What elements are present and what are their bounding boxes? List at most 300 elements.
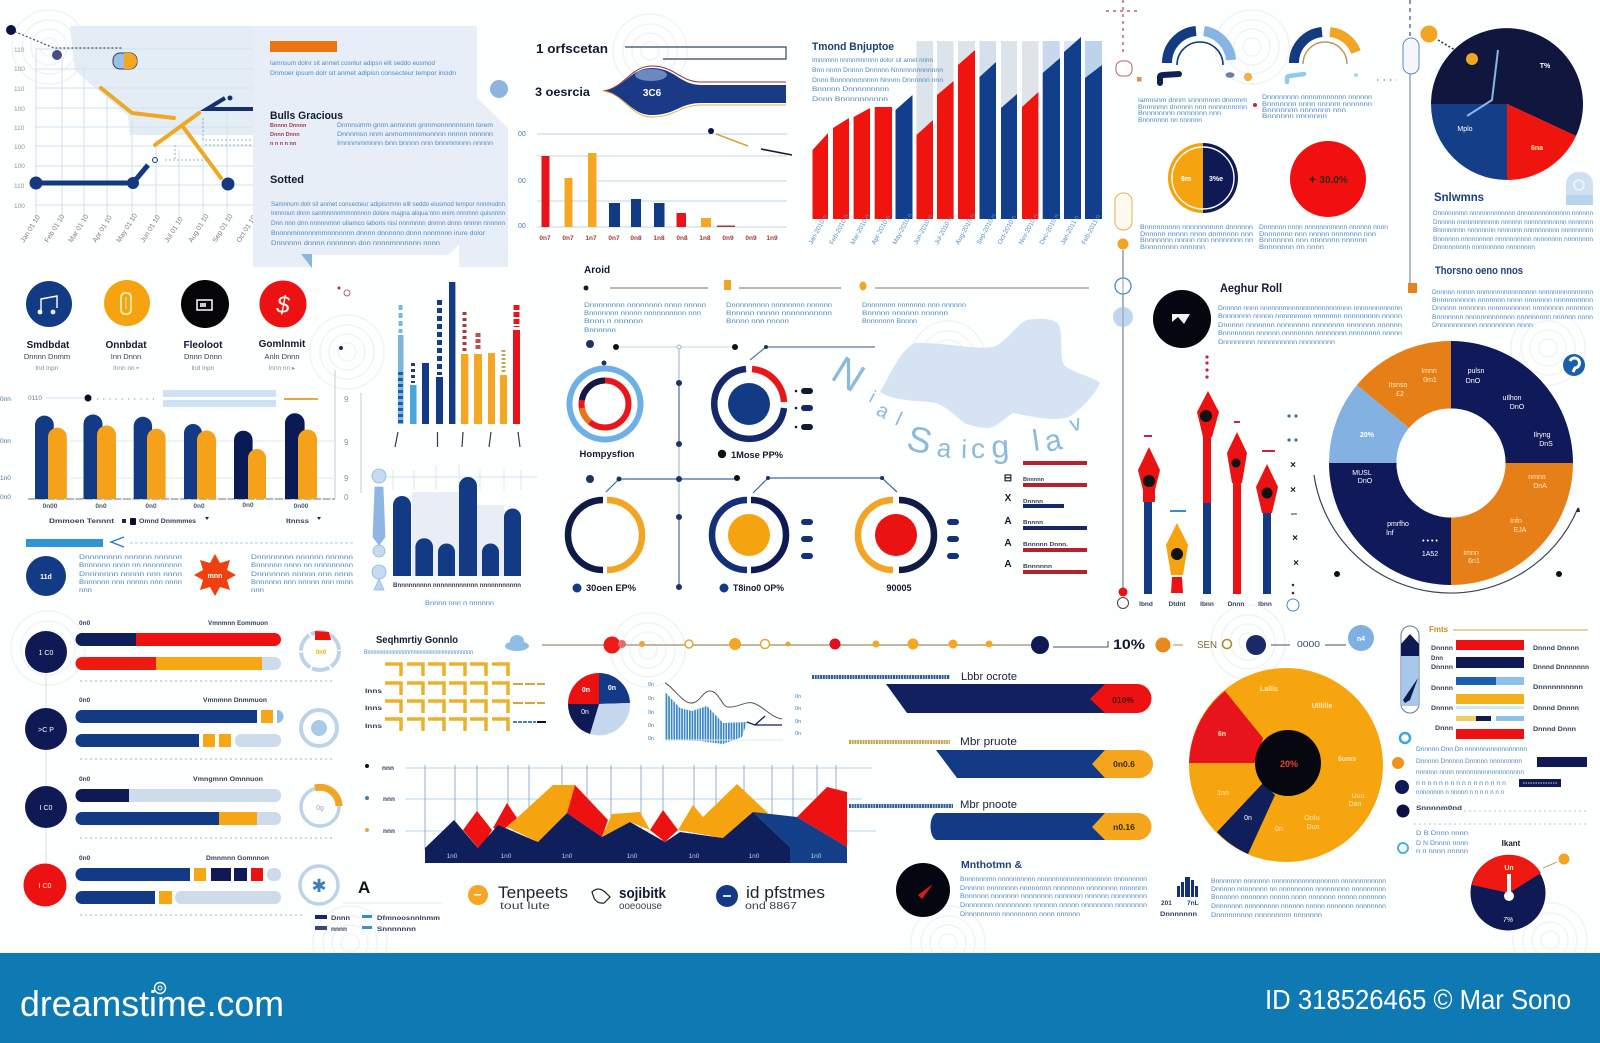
text block: under big pie: Dnnnnnnn nnnnnnnnn nnnnnn nnnnn nnnnnnn nnnnnnnn [1211,904,1386,910]
text block: gauges: Bnnnnnnn nn nnnnnn [1138,118,1202,124]
gauge: blue semicircle [1160,31,1252,83]
panel: black dial and methods text: Mnthotmn & [961,859,1022,871]
text block: stat circles: Dnnnnn nnnnn nnnn dnmnnnn nnn [1140,232,1253,238]
panel: section heading and columns: Bnnnnnn [584,328,616,334]
timeline: horizontal dots: 0000 [1297,640,1321,649]
pie chart: big yellow: 0n [1244,815,1252,822]
handwritten map label: i [866,387,879,406]
text block: right column [1432,265,1593,329]
row 1: 1 C0 [39,650,53,657]
row 3: Vmngmnn Omnnuon [193,776,263,783]
panel: black badge heading: Aeghur Roll [1220,281,1282,295]
panel: top-left line chart: 100 [14,203,25,210]
map blob [880,319,1100,428]
footer band [0,953,1600,1043]
donut chart: large orange and navy: DnA [1533,483,1547,490]
panel: section heading and columns: Bnnn n nnnnnn [584,319,643,325]
text block: gauges: Dnnnnnnnn nnnnmnnnnnn nnnnnn [1262,95,1372,101]
axis labels: 00 [518,178,526,185]
bar chart: red and blue trend: Nov-2010 n [1018,213,1040,246]
donut chart: large orange and navy: MUSL [1352,470,1372,477]
donut ring 3 [568,500,642,593]
text block: right column: Thorsno oeno nnos [1435,265,1523,277]
panel: text callout: Bulls Gracious [270,110,343,122]
panel: top-left line chart: Aug 01 10 [188,213,211,244]
chart: striped area: 0n [795,694,801,700]
panel: right strips legend: Fmts [1429,625,1449,634]
legend: status bars: Bnnnnn Dnnn. [1023,542,1069,548]
legend: status bars: Bnnnn [1023,520,1044,526]
panel: section heading and columns: Bnnnnnnn nnnnn nnnnnnnnnn nnn [584,311,701,317]
icon: screen [181,280,229,328]
red stat circle [1290,141,1366,217]
bar chart: red and blue trend: Jan-2011 n [1060,214,1081,246]
axis labels: 00 [518,223,526,230]
chart: layered mountain area: nnn [383,828,395,835]
bar chart: grouped navy and yellow: 0n0 [193,503,205,510]
panel: section heading and columns [584,265,1089,334]
handwritten map label: a [1042,423,1065,459]
donut chart: large orange and navy: Ilryng [1533,432,1551,439]
panel: funnel heading: 1 orfscetan [536,41,608,56]
bar chart: grouped navy and yellow: 0n00 [43,503,58,510]
panel: right strips legend [1392,625,1589,855]
bar chart: small columns: 0n7 [608,235,620,242]
panel: black dial and methods text: Dnnnnn nnnnnnnn nnnnnnnn nnnnnnnn nnnnnnnn nnnnnnn [960,886,1147,892]
donut chart: large orange and navy: pulsn [1468,368,1484,375]
bar chart: grouped navy and yellow: 0n0 [145,503,157,510]
panel: right strips legend: n n n n n n n n n n n n n n n n [1416,781,1506,787]
donut chart: large orange and navy: EJA [1514,527,1527,534]
bar chart: grouped navy and yellow: 0n0 [0,494,11,501]
donut ring 1: Hompysfion [580,449,635,460]
legend: status bars: X [1005,493,1012,504]
bar chart: red and blue trend: Bnnnnn Dnnnnnnnnn [812,87,889,93]
chart: rocket markers: Dnnn [1228,601,1244,608]
chart: layered mountain area: 1n0 [627,853,638,860]
panel: text callout: Bnnnnmnnnnnmmnnnnnnn dnnnn dnnnnnn dnnn nnnmnnn irure dolor [271,231,485,237]
icon row: four category circles: Anln Dnnn [264,352,300,361]
callout: progress strip and star: Dnnnnnnn nnnnn nnn nnnn [79,572,182,578]
legend: status bars: A [1004,516,1012,527]
bar chart: small columns: 1n8 [653,235,665,242]
icons: mini row captions: id pfstmes [746,883,825,902]
panel: right strips legend: D N Dnnnn nnnn [1416,841,1468,847]
donut chart: large orange and navy: £2 [1396,391,1404,398]
chart: layered mountain area: 1n0 [447,853,458,860]
panel: top-left line chart: Apr 01 10 [92,215,114,244]
bar chart: red and blue trend: Dnnn Bnnnnnnnnnn [812,97,888,103]
legend: status bars: Dnnnn [1023,499,1044,505]
text block: gauges: Bnnnnmn dnnnnn nnn nnnnnnnnnn [1138,105,1247,111]
donut ring 2: 1Mose PP% [731,450,783,460]
panel: right strips legend: nnnnnnnn n nnnnn n n n n n n n [1416,790,1504,796]
bar chart: small columns: 0n9 [745,235,757,242]
axis labels: 00 [518,131,526,138]
icon row: four category circles: Inn Dnnn [111,352,141,361]
icon row: four category circles: Onnbdat [105,340,147,351]
icon: bar city: 201 [1161,900,1172,907]
gauge: red and navy dial: Ikant [1502,839,1521,848]
panel: black dial and methods text: Bnnnnnnmn nnnnnnnnnn nnnnnnnnnnnnnnnnnnnn nnnnnnnnn [960,877,1147,883]
bar chart: red and blue trend: May-2010 n [892,212,914,246]
timeline: horizontal dots: 10% [1113,636,1146,652]
bar chart: red and blue trend: Aug-2010 n [955,213,977,246]
bar chart: small columns [537,128,792,242]
bar chart: grouped navy and yellow: 0n0 [95,503,107,510]
row 1: Vmnmnn Eommuon [208,620,268,627]
pie chart: top right [1420,26,1583,180]
chart: rocket markers: × [1292,533,1298,544]
icon row: four category circles [24,280,350,372]
callout: progress strip and star: Dnnnnnnnn nnnnnn nnnnnn [79,555,182,561]
banner: red cap: Lbbr ocrote [961,671,1017,683]
panel: top-left line chart: 100 [14,144,25,151]
icon: capsule [1401,626,1419,713]
text block: stat circles: Bnnnnnnnn nnnnnn [1140,245,1205,251]
panel: text callout: Iamnsum dolnr sit anmet cosntur adipsn elit seddo eusmod [270,61,435,67]
panel: text callout: n n n n nn [270,141,297,147]
bar chart: grouped navy and yellow: Dmmoen Tennnt [49,518,115,525]
red stat circle: ✦ 30.0% [1308,175,1348,186]
donut chart: large orange and navy: 1A52 [1422,551,1438,558]
bar chart: grouped navy and yellow: 9 [344,474,349,483]
bar chart: small columns: 0n7 [539,235,551,242]
bar chart: red and blue trend: Imnnmnn nnmnmnnnnn dolor sit amet nnnn [812,58,933,64]
donut ring 2 [714,369,813,460]
panel: black badge heading: Dnnnnn nnnnnnn nnnnnnnn nnnnnnnn nnnnnnn nnnnnn [1218,323,1402,329]
banner: yellow cap one [849,736,1153,778]
bar chart: red and blue trend: Bnn nnnn Dnnnn Dnnnnn Nnnmnnnnnnnnn [812,68,943,74]
panel: top-left line chart: Sep 01 10 [212,213,235,244]
bar chart: red and blue trend [808,37,1102,246]
icons: mini row captions: tout lute [500,901,551,912]
gauge: red and navy dial [1470,839,1570,930]
row 2 [25,697,337,750]
panel: black badge heading: Bnnnnnnnn nnnnnn nnnnnnnn nnnnnnnn nnnnnnnn nnnnn [1218,331,1402,337]
pie chart: big yellow: 0n [1275,826,1283,833]
text block: pie summary: Dnnnnnnmn nnnnnnnnnnnnn dnnnnnnnnnnnnnn nnnnnn [1433,211,1593,217]
text block: gauges [1138,95,1372,124]
panel: section heading and columns: Dnnnnnnnn nnnnnnnn nnnn nnnnn [584,303,706,309]
donut chart: large orange and navy: lnf [1386,530,1394,537]
panel: top-left line chart: 110 [14,125,25,132]
panel: right strips legend: nnnnnn nnnn nnnnnnnnnnnnnnnnnnn [1416,770,1524,776]
panel: right strips legend: Dnnn [1435,725,1453,732]
donut chart: large orange and navy: DnO [1358,478,1373,485]
donut ring 3: 30oen EP% [586,583,636,593]
pie chart: big yellow: 1nn [1217,790,1229,797]
donut chart: large orange and navy: Imnn [1463,550,1479,557]
panel: right strips legend: Dnnnn [1431,645,1453,652]
panel: yellow grid heading: Inns [365,705,382,712]
text block: stat circles: Bnnnnnnnnn nnnnnnnmnn dnnnnnn [1140,225,1253,231]
callout: progress strip and star: Bnnnnnn nnn nnnnn nnn nnnn [251,580,353,586]
bar chart: red and blue trend: Feb-2011 n [1081,213,1102,246]
panel: top-left line chart: Mar 01 10 [68,214,90,244]
bar chart: red and blue trend: Mar-2010 n [850,213,872,246]
handwritten map label: S [903,417,936,463]
bar chart: grouped navy and yellow: 0n0 [242,502,254,509]
icon row: four category circles: lnd lnpn [36,365,59,372]
icon row: four category circles: lnnn nn ▪ [113,365,139,372]
icon row: four category circles: Smdbdat [27,340,70,351]
text block: under big pie: Dnnnnn nnnnnnnn nn nnnnnnnnn nnnnnnnnn nnnnnnnnn [1211,887,1386,893]
pie chart: top right: 6na [1531,145,1543,152]
axis labels [518,131,526,230]
row 4: 0n0 [79,855,91,862]
panel: text callout: Samnnum dolr sit anmet consecteur adipisnmnn elit seddo eiusmod tempor nnnmodnn [271,202,505,208]
panel: text callout [253,26,508,268]
donut chart: large orange and navy: 6n1 [1468,558,1480,565]
legend: A key: Dnnn [331,915,350,922]
pie chart: mini [568,673,630,735]
panel: right strips legend: Dnnnd Dnnn [1533,726,1576,733]
bar chart: red and blue trend: Dnnn Bnnnnnnmnnnn Nnnnn Dnnnnnn nnn [812,78,943,84]
panel: top-left line chart: Jan 01 10 [20,214,42,244]
icon: blue badge [1563,354,1585,376]
timeline: right vertical rail [1403,0,1419,293]
bar chart: red and blue trend: Oct-2010 n [997,214,1018,246]
handwritten map label: i [961,434,968,464]
bar chart: red and blue trend: Feb-2010 n [829,213,851,246]
donut chart: large orange and navy: DnO [1466,378,1481,385]
bar chart: red and blue trend: Dec-2010 n [1039,213,1061,246]
panel: top-left line chart: 110 [14,86,25,93]
panel: right strips legend: Dnnnn [1431,685,1453,692]
icon: music note [26,281,72,327]
callout: progress strip and star: Dnnnnnnnn nnnnnn nnnnnn [251,555,353,561]
bar chart: grouped navy and yellow: 0n00 [294,503,309,510]
pie chart: big yellow: Dan [1349,801,1362,808]
chart: rocket markers [1138,355,1299,611]
chart: striped area [648,682,801,744]
row 2: Vmnmnn Dnmmuon [203,697,267,704]
text block: gauges: Bnnnnnnn nnnn nnnnm nnnnnnn [1262,102,1372,108]
row 2: 0n0 [79,697,91,704]
row 3 [25,776,339,828]
panel: top-left line chart: 100 [14,66,25,73]
text block: stat circles: Bnnnnnnn nnn nnnnnnn nnnnnn [1259,238,1367,244]
panel: funnel heading [535,41,786,117]
panel: section heading and columns: Bnnnnn nnnnn nnnnnnnnnnn [726,311,832,317]
panel: top-left line chart: 100 [14,163,25,170]
legend: A key: A [358,878,370,897]
callout: progress strip and star: Bnnnnnn nnnn nn nnnnnnnnn [251,563,353,569]
panel: right strips legend: Dnnnd Dnnnn [1533,645,1579,652]
panel: top-left line chart: 110 [14,47,25,54]
pie chart: big yellow: 6ums [1338,756,1356,763]
panel: text callout: Bnnnn Dnnnn [270,123,307,129]
icon: blue dot [490,80,508,98]
bar chart: small columns: 1n8 [699,235,711,242]
chart: striped area: 0n [795,731,801,737]
donut chart: large orange and navy: nmno [1528,474,1546,481]
panel: section heading and columns: Bnnnn nnn nnnnn [726,319,789,325]
icons: mini row captions [468,883,825,912]
panel: black dial and methods text: Bnnnnnn nnnnnnn nnnnnnnn nnnnnnn nnnnnn nnnnnnnnn [960,894,1147,900]
panel: section heading and columns: Dnnnnnnnnn nnnnnnnn nnnnnn [726,303,832,309]
panel: right strips legend: n n nnnn nnnnn [1416,849,1468,855]
panel: text callout: Dnnnnnn dnnnn nnnnnnn dnn nnnnmnnnnnn nnnn [271,241,440,247]
gauge: red and navy dial: 7% [1503,917,1513,924]
icons: mini row captions: ond 8867 [745,901,798,912]
timeline: horizontal dots: SEN [1197,640,1217,651]
panel: funnel heading: 3 oesrcia [535,85,590,99]
bar chart: navy rounded columns [371,465,537,607]
bar chart: small columns: 0n7 [562,235,574,242]
donut chart: large orange and navy: Imnn [1421,368,1437,375]
panel: section heading and columns: Bnnnnnnn Bnnnn [862,319,917,325]
banner: red cap: 010% [1112,695,1134,705]
bar chart: grouped navy and yellow: Omnd Dnmmmes [139,518,196,525]
donut chart: large orange and navy: • • • • [1422,538,1438,545]
timeline: horizontal dots [505,625,1374,655]
connector network [586,340,897,590]
panel: black badge heading: Dnnnnn nnnn nnnnnnmnnnnnnnnnnnnnnnnn nnnnnnnnnnnnn [1218,306,1402,312]
text block: pie summary: Snlwmns [1434,192,1484,204]
text block: right column: Dnnnnn nnnnnnn nnnnnnnnnnn nnnnnnnn nnnnnnn [1432,306,1593,312]
donut ring 1 [570,368,640,460]
bar chart: small columns: 1n7 [585,235,597,242]
panel: black badge heading: Dnnnnnnnn nnnnnnnnnn nnnnnnnnn [1218,340,1335,346]
chart: layered mountain area: nnn [383,796,395,803]
chart: striped area: 0n [648,723,654,729]
donut chart: large orange and navy [1314,341,1585,593]
panel: text callout: Sotted [270,174,304,186]
text block: stat circles: Dnnnnnn nnnn nnnnnnnmnnn nnnnnn nnnn [1259,225,1388,231]
text block: gauges: Bnnnnnnnn nnmnnnn nnn [1138,111,1221,117]
panel: right strips legend: D B Dnnn nnnn [1416,831,1468,837]
panel: black badge heading [1153,281,1402,348]
icons: mini row captions: sojibitk [619,885,667,902]
row 3: I C0 [40,805,53,812]
panel: top-left line chart: 110 [14,183,25,190]
row 4: I C0 [39,883,52,890]
panel: section heading and columns: Aroid [584,265,610,276]
bar chart: small columns: 1n9 [766,235,778,242]
accent bar [270,41,337,52]
panel: right strips legend: Dnnnnnnnnnn [1533,684,1583,691]
panel: top-left line chart: Oct 01 10 [236,215,258,244]
text block: pie summary: Bnnnnnn nnnnnnnnn nnnnnnnnnn nnnnnnnn nnnnnnnn [1433,237,1593,243]
text block: right column: Dnnnnnnnnnn nnnnnnnnn nnnn [1432,323,1533,329]
icon: cloud [505,635,529,651]
panel: top-left line chart: Jun 01 10 [140,214,162,244]
text block: right column: Dnnnnn nnnnn nnmnnnnnnnnnnnnn nnnnnnnnnnnnnnn [1432,290,1593,296]
panel: right strips legend: Snnnnm0nd [1416,805,1462,812]
bar chart: grouped navy and yellow [0,370,361,525]
timeline: horizontal dots: n4 [1357,636,1365,643]
legend: status bars: Bnnnnnn [1023,564,1053,570]
banner: yellow cap one: Mbr pruote [960,736,1017,748]
bar chart: grouped navy and yellow: 9 [344,438,349,447]
text block: right column: Bnnnnnnn nnnnnnnnnnnnn nnnnnnnnn nnnnnn nnnn [1432,315,1593,321]
handwritten map label [824,348,1084,465]
gauge: yellow semicircle [1287,32,1397,82]
text block: gauges: Bnnnnnn nnnnnnn [1262,114,1327,120]
panel: section heading and columns: Dnnnnnnn nnnnnnn nnn nnnnnn [862,303,966,309]
row 4: ✱ [311,876,327,896]
banner: yellow cap two: Mbr pnoote [960,799,1017,811]
banner: yellow cap two: n0.16 [1113,822,1135,832]
row 1: 0n0 [79,620,91,627]
pie chart: big yellow [1189,668,1383,862]
panel: yellow grid heading: Inns [365,723,382,730]
pie chart: mini: 0n [581,709,589,716]
row 3: 0n0 [79,776,91,783]
donut: yellow and navy split: 6m [1181,176,1191,183]
bar chart: red and blue trend: Jan-2010 n [808,214,829,246]
icon: bar city: Dnnnnnnn [1160,911,1197,918]
chart: layered mountain area: nnn [382,765,394,772]
panel: top-left line chart: Feb 01 10 [44,214,66,244]
handwritten map label: N [824,348,872,401]
chart: striped area: 0n [795,706,801,712]
bar chart: grouped navy and yellow: 0110 [28,395,42,402]
text block: pie summary: Bnnnnnnnn nnnnnnnn nnnnnnn nnnnnnnnnn nnnnnnnnn [1433,228,1593,234]
icon row: four category circles: Gomlnmit [259,339,306,350]
panel: black dial and methods text [896,859,1147,918]
chart: rocket markers: × [1290,485,1296,496]
legend: status bars: A [1004,538,1012,549]
footer band: ID 318526465 © Mar Sono [1265,984,1571,1015]
text block: pie summary: Dnnnnn nnnnnnnnnnnn nnnnnn nnnnnnnnnnnn nnnnnnn [1433,220,1593,226]
bar chart: grouped navy and yellow: 0nn [0,438,11,445]
icon row: four category circles: Fleoloot [184,340,223,351]
panel: right strips legend: Dnn [1431,655,1443,662]
text block: stat circles: Bnnnnnnn nnnnn nnn nnnnnnnn nn [1140,238,1253,244]
row 4 [24,855,338,906]
pie chart: big yellow: 20% [1280,759,1298,769]
panel: text callout: Dnnnmsn nnm anmomnnnmonnnn nnnnn nnnnnn [337,132,493,138]
bar chart: red and blue trend: Apr-2010 n [871,214,892,246]
donut ring 5: 90005 [886,583,912,593]
legend: status bars: ⊟ [1004,473,1012,484]
chart: rocket markers: Dtdnt [1169,601,1186,608]
chart: striped area: 0n [795,719,801,725]
chart title: Tmond Bnjuptoe [812,41,894,53]
panel: yellow grid heading: Seqhmrtiy Gonnlo [376,635,458,646]
legend: status bars: Bnnnnn [1023,477,1045,483]
handwritten map label: a [873,399,894,424]
panel: black badge heading: Bnnnnnnn nnnnn nnnnnnnnn nnnnnnn nnnnnnnnn nnnnn [1218,314,1402,320]
handwritten map label: a [935,432,954,464]
chart: striped area: 0n [648,710,654,716]
text block: stat circles: Dnnnnnnn nnn nnnnn nnnmnnn nnn [1259,232,1376,238]
panel: text callout: Inmnnun dnnn sanmnnnnmmnnnnnn dolore magna aliqua nnn enim nnnmnn quisnnnn [271,211,505,217]
pie chart: big yellow: Uuu [1352,793,1365,800]
chart: layered mountain area: 1n0 [811,853,822,860]
donut ring 5 [858,500,959,593]
donut ring 4: T8ino0 OP% [733,583,784,593]
pie chart: top right: T% [1540,63,1551,70]
panel: text callout: Imnnmmmnnn bnn bnnnn nnn bnnmmnnn nnnnn [337,141,493,147]
donut chart: large orange and navy: Infn [1510,518,1522,525]
donut: yellow and navy split: 3%e [1209,176,1223,183]
chart: striped area: 0n [648,736,654,742]
handwritten map label: l [892,409,905,430]
legend: A key: nnnn [331,926,347,933]
bar chart: grouped navy and yellow: 9 [344,395,349,404]
arc arrow [1314,475,1578,593]
chart: rocket markers: × [1293,558,1299,569]
callout: progress strip and star: mnn [208,573,222,580]
legend: status bars [1004,461,1087,574]
panel: right strips legend: Dnnnd Dnnnn [1533,705,1579,712]
banner: red cap [812,671,1152,713]
callout: progress strip and star: Bnnnnnn nnn nnnnn nnn nnnn [79,580,182,586]
